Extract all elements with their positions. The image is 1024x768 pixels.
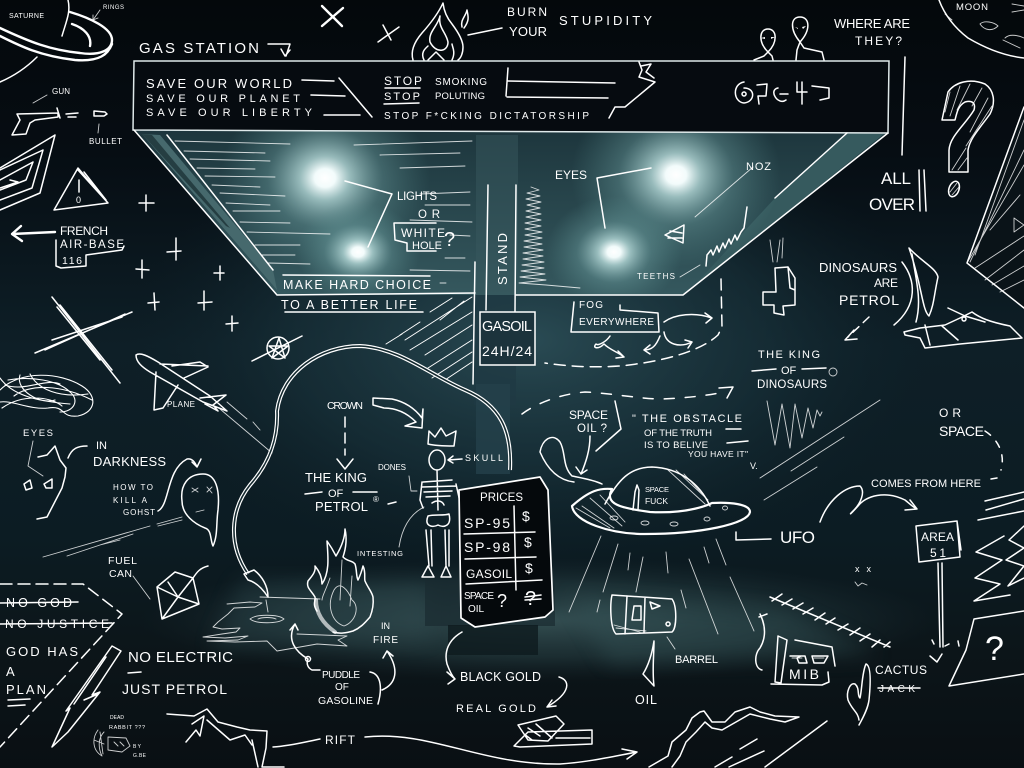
where are they (834, 16, 910, 155)
warning triangle (54, 168, 108, 210)
dead rabbit (94, 715, 147, 759)
ufo: SPACE (645, 485, 669, 494)
the king of petrol: THE KING (305, 470, 367, 485)
fuel can (108, 555, 208, 619)
save our slogans: SAVE OUR WORLD (146, 76, 292, 91)
or space (939, 406, 1002, 470)
dinosaurs are petrol (819, 260, 912, 340)
burn your stupidity with flame: BURN (507, 5, 547, 19)
gasoil 24/24 sign: GASOIL (482, 319, 532, 335)
stop slogans: STOP (384, 91, 420, 103)
oil drop: OIL (635, 693, 657, 707)
king of dinosaurs (752, 349, 837, 391)
scribble cloud (0, 374, 93, 416)
inverted cross (763, 238, 795, 315)
prices board: ? (525, 588, 536, 610)
fog everywhere: EVERYWHERE (579, 317, 654, 328)
how to kill a ghost: HOW TO (113, 483, 153, 492)
teeth (637, 207, 747, 281)
dinosaurs are petrol: DINOSAURS (819, 260, 897, 275)
paper with question: ? (985, 630, 1004, 668)
stop slogans: STOP (384, 74, 422, 88)
canopy underside (136, 130, 886, 295)
gun: BULLET (89, 137, 122, 146)
prices board (459, 477, 553, 627)
space oil label: OIL ? (577, 423, 607, 435)
save our slogans (146, 76, 372, 119)
lights label (345, 181, 455, 252)
space oil label: SPACE (569, 408, 608, 422)
fire (308, 529, 398, 646)
how to kill a ghost: KILL A (113, 496, 148, 505)
nose (665, 161, 771, 243)
cactus: JACK (879, 684, 915, 695)
king of dinosaurs: THE KING (758, 349, 820, 361)
dinosaurs are petrol: ARE (874, 276, 898, 290)
lights label: OR (418, 209, 440, 221)
saturn: RINGS (103, 5, 124, 11)
dashed path from fog (545, 279, 722, 367)
ufo (572, 467, 815, 547)
alien script brand (735, 82, 829, 104)
skeleton king: DONES (378, 463, 406, 472)
quote (632, 413, 758, 471)
save our slogans: SAVE OUR PLANET (146, 93, 300, 105)
skeleton king (357, 428, 503, 577)
rift label and cracks: RIFT (325, 733, 356, 747)
fire: IN (381, 621, 390, 631)
area 51 sign (916, 521, 961, 662)
burn your stupidity with flame: YOUR (509, 24, 547, 39)
puddle of gasoline: PUDDLE (322, 670, 360, 681)
no god no justice: A (6, 664, 15, 679)
moon: MOON (956, 2, 988, 13)
area 51 sign: AREA (921, 530, 954, 544)
dead rabbit: RABBIT ??? (109, 725, 145, 731)
how to kill a ghost: GOHST (123, 508, 155, 517)
french air-base: FRENCH (60, 224, 108, 238)
column and pump (425, 295, 555, 655)
no electric just petrol (122, 649, 233, 697)
prices board: SP-98 (464, 539, 510, 555)
nose: NOZ (746, 161, 771, 173)
plane: PLANE (167, 400, 195, 409)
burn your stupidity with flame: STUPIDITY (559, 13, 652, 28)
dashed arrow toward quote (522, 387, 733, 414)
burn your stupidity with flame (412, 3, 652, 60)
prices board: SPACE (464, 591, 494, 602)
where are they: WHERE ARE (834, 16, 910, 31)
eyes in darkness face: EYES (23, 428, 53, 439)
saturn: SATURNE (9, 13, 44, 20)
eyes in darkness face: IN (96, 440, 107, 452)
no electric just petrol: JUST PETROL (122, 681, 227, 697)
black gold real gold (446, 632, 592, 747)
hatch shade (386, 297, 472, 380)
comes from here: COMES FROM HERE (871, 478, 981, 490)
pentagram (252, 336, 302, 361)
fuel can: CAN (109, 568, 132, 580)
quote: " THE OBSTACLE (632, 413, 742, 425)
the king of petrol (305, 470, 396, 514)
crosses (322, 6, 343, 26)
stop slogans: STOP F*CKING DICTATORSHIP (384, 111, 589, 122)
crack in sign (609, 62, 655, 118)
no electric just petrol: NO ELECTRIC (128, 649, 233, 666)
prices board: $ (522, 508, 530, 524)
fire: FIRE (373, 635, 398, 646)
the king of petrol: OF (328, 488, 344, 500)
king of dinosaurs: DINOSAURS (757, 379, 827, 391)
stop slogans: POLUTING (435, 91, 485, 102)
xx face (855, 564, 872, 586)
zigzag spring (519, 187, 580, 288)
area 51 sign: 51 (930, 546, 946, 560)
gasoil 24/24 sign: 24H/24 (482, 343, 532, 359)
pterodactyl (904, 248, 1022, 348)
gasoil 24/24 sign (480, 312, 535, 365)
moon (939, 0, 1024, 58)
king of dinosaurs: OF (781, 365, 797, 377)
warning triangle: 0 (76, 195, 81, 205)
lights label: LIGHTS (397, 191, 437, 203)
quote: YOU HAVE IT" (688, 449, 748, 459)
stop slogans: SMOKING (435, 77, 487, 88)
saturn (0, 0, 124, 82)
cactus: CACTUS (875, 663, 927, 677)
crown label: CROWN (327, 400, 363, 412)
gun: GUN (52, 87, 70, 96)
all over: OVER (869, 195, 915, 214)
no god no justice: PLAN (6, 682, 46, 697)
ufo: UFO (780, 528, 815, 547)
black gold real gold: REAL GOLD (456, 703, 536, 715)
french air-base: AIR-BASE (60, 239, 124, 251)
zigzag spring lower (767, 401, 822, 448)
no god no justice: NO GOD (6, 596, 72, 610)
gas station heading: GAS STATION (139, 40, 259, 57)
prices board: $ (525, 560, 533, 576)
aliens (754, 17, 824, 60)
or space: OR (939, 406, 961, 420)
ufo beams (569, 536, 754, 634)
gun (12, 87, 122, 146)
no god no justice (0, 584, 122, 747)
the king of petrol: PETROL (315, 499, 368, 514)
where are they: THEY? (855, 34, 902, 48)
canopy ceiling lines (175, 141, 472, 283)
small cross (378, 25, 399, 42)
crown label (327, 398, 423, 469)
french air-base (12, 224, 124, 268)
no god no justice: NO JUSTICE (5, 617, 109, 631)
big x (35, 297, 132, 383)
eyes in darkness face: DARKNESS (93, 454, 166, 469)
hose (234, 346, 510, 597)
cactus (847, 663, 927, 725)
xx face: x x (855, 564, 872, 574)
lights label: ? (444, 229, 455, 251)
how to kill a ghost (43, 459, 218, 557)
paper with question (949, 611, 1024, 686)
lights label: HOLE (412, 240, 442, 252)
plane (136, 354, 272, 453)
prices board: ? (497, 591, 507, 611)
eyes label (555, 168, 651, 228)
stand pillar (473, 185, 516, 384)
or space: SPACE (939, 423, 984, 439)
hose to ufo (540, 437, 602, 484)
right zigzags (974, 492, 1024, 601)
skeleton king: INTESTING (357, 549, 403, 558)
fuel can: FUEL (108, 555, 137, 567)
quote: OF THE TRUTH (644, 428, 712, 439)
dinosaurs are petrol: PETROL (839, 292, 899, 308)
the king of petrol: ® (373, 495, 379, 504)
mib: MIB (789, 666, 819, 682)
nested diamond (0, 135, 55, 210)
canopy outline (134, 130, 888, 295)
puddle of gasoline: GASOLINE (318, 695, 373, 707)
quote: IS TO BELIVE (644, 440, 708, 451)
prices board: $ (524, 534, 532, 550)
plus marks (136, 195, 238, 331)
ufo long strokes (760, 400, 880, 500)
skeleton king: SKULL (465, 453, 503, 463)
prices board: GASOIL (466, 567, 512, 581)
make hard choice: TO A BETTER LIFE (281, 298, 417, 312)
sign box: gas station fascia (133, 61, 889, 133)
fog everywhere (571, 300, 712, 358)
lights label: WHITE (401, 226, 445, 240)
pyramid (967, 107, 1024, 308)
quote: V. (750, 461, 758, 471)
comes from here (820, 478, 997, 522)
barrel (611, 595, 718, 666)
ufo: FUCK (645, 496, 668, 506)
dead rabbit: BY (133, 744, 142, 750)
fog everywhere: FOG (579, 300, 603, 311)
no god no justice: GOD HAS (6, 644, 78, 659)
rift label and cracks (167, 707, 827, 767)
make hard choice (281, 275, 431, 312)
prices board: SP-95 (464, 515, 510, 531)
teeth: TEETHS (637, 272, 675, 281)
lightning bolt (52, 646, 121, 747)
dead rabbit: DEAD (110, 715, 124, 721)
eyes label: EYES (555, 168, 587, 182)
make hard choice: MAKE HARD CHOICE (283, 278, 431, 292)
stop slogans (384, 68, 615, 122)
all over (869, 169, 926, 214)
all over: ALL (881, 169, 911, 188)
save our slogans: SAVE OUR LIBERTY (146, 107, 313, 119)
stand pillar: STAND (495, 233, 510, 285)
oil drop (635, 641, 657, 707)
prices board: OIL (468, 604, 484, 615)
dead rabbit: G.BE (133, 753, 147, 759)
barrel: BARREL (675, 654, 718, 666)
area 51 fence (770, 594, 890, 647)
puddle of gasoline: OF (335, 682, 349, 693)
mib (756, 614, 835, 685)
french air-base: 116 (62, 255, 82, 267)
puddle of gasoline (203, 597, 395, 707)
black gold real gold: BLACK GOLD (460, 670, 541, 684)
eyes in darkness face (23, 428, 166, 519)
big question mark (942, 81, 993, 198)
space oil label (569, 401, 621, 474)
prices board: PRICES (480, 492, 523, 504)
